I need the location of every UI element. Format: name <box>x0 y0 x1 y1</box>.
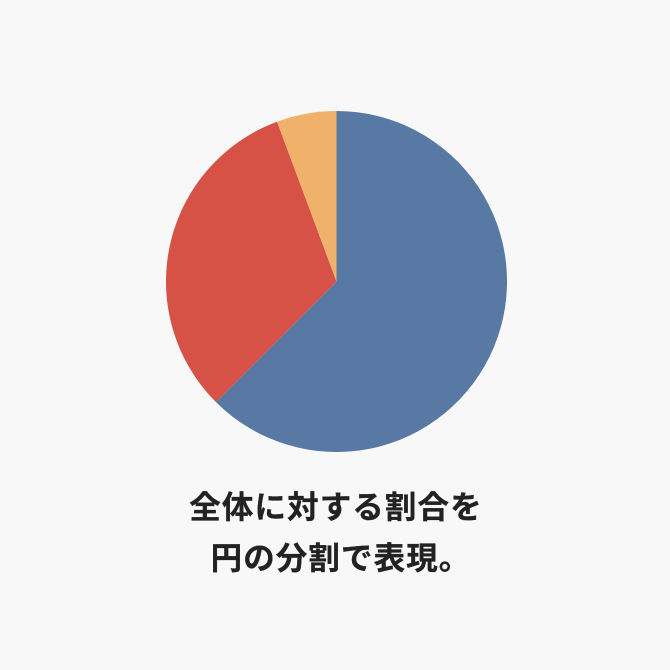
slice: blue (largest share) <box>216 111 507 452</box>
caption <box>189 489 483 576</box>
slice: orange <box>277 111 336 282</box>
caption: 全体に対する割合を <box>189 489 483 525</box>
slice: red <box>166 122 336 402</box>
caption: 円の分割で表現。 <box>211 540 471 576</box>
